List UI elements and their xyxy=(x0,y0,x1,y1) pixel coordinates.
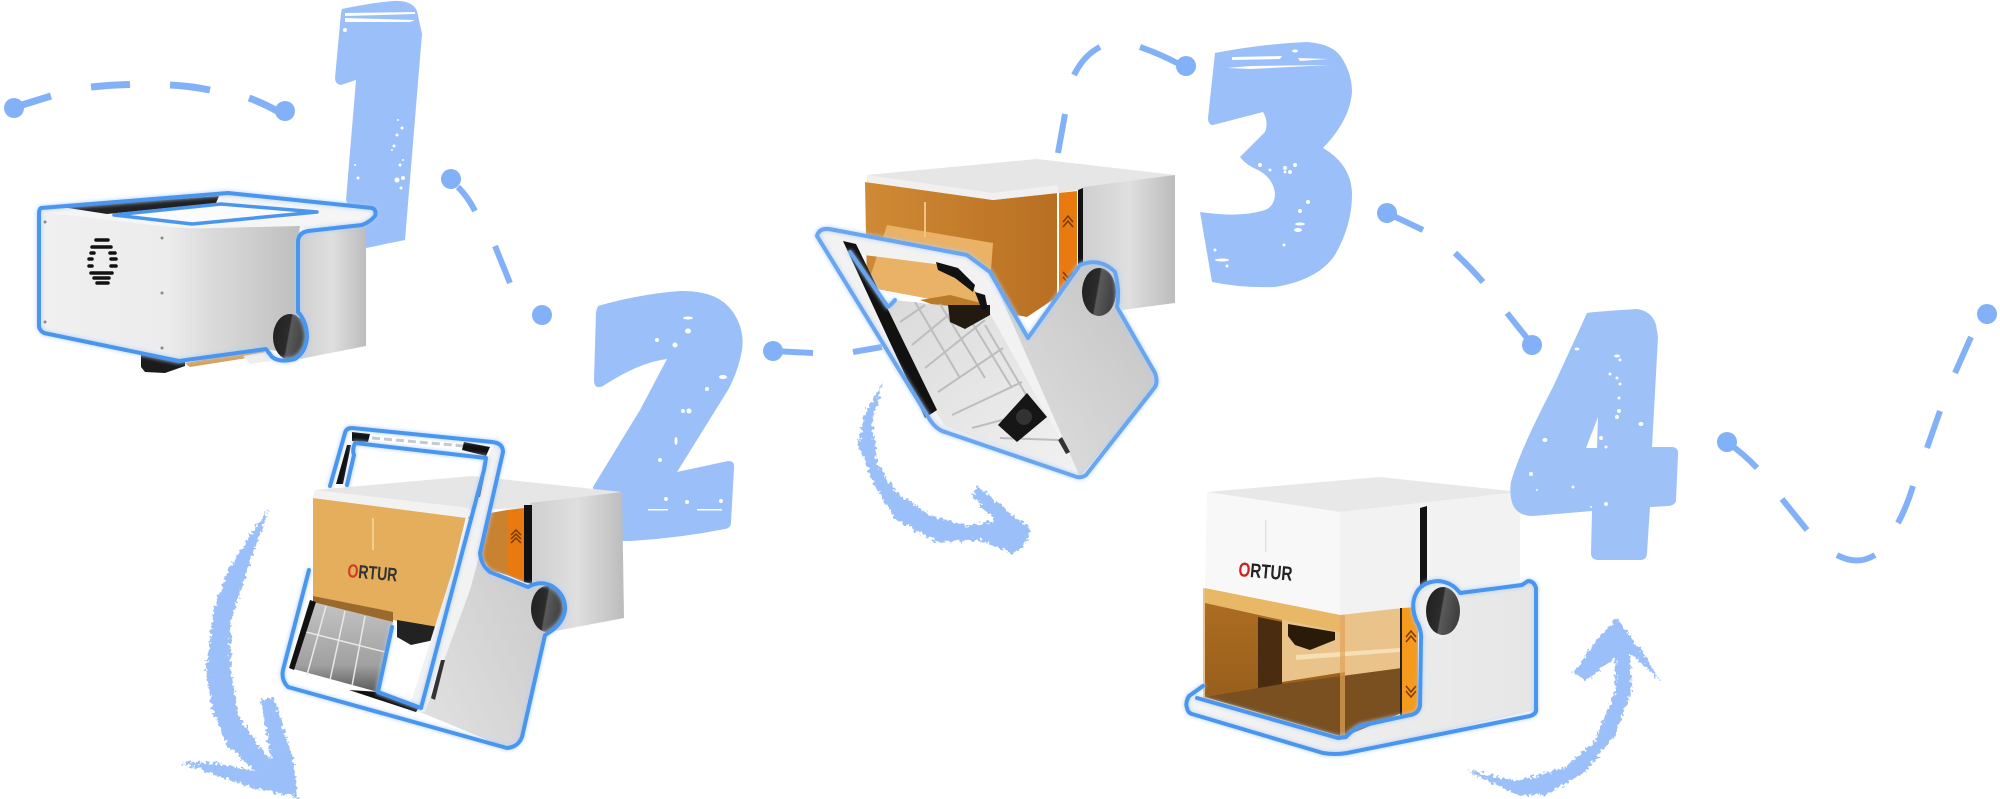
dashed path segment 2 xyxy=(441,169,552,325)
screws xyxy=(44,220,164,350)
orange strip xyxy=(507,508,524,582)
lid panel frame xyxy=(333,428,495,485)
print head xyxy=(397,620,438,645)
device step 4: closed with base xyxy=(1186,477,1536,754)
logo: ORTUR xyxy=(1238,559,1294,586)
dashed path segment 1 xyxy=(4,84,295,121)
lid frame xyxy=(817,229,1080,477)
interior ribs xyxy=(888,300,1073,470)
blue outline xyxy=(817,229,1156,477)
black slot xyxy=(1420,506,1427,587)
rotation arrow 2 xyxy=(180,510,298,797)
orange strip xyxy=(1402,607,1418,716)
knob xyxy=(1415,585,1455,639)
print head xyxy=(948,305,990,329)
digit 2 xyxy=(593,291,743,541)
orange front xyxy=(313,498,466,630)
rotation arrow 4 xyxy=(1467,618,1660,795)
base xyxy=(1186,581,1536,753)
fan xyxy=(998,393,1047,442)
blue outline xyxy=(39,193,376,361)
orange front xyxy=(865,182,1057,317)
orange chamber xyxy=(1203,588,1402,737)
lid frame rails xyxy=(843,241,937,418)
rotation arrow 3 xyxy=(858,382,1030,554)
top face xyxy=(41,193,375,232)
device step 2: lid opening xyxy=(283,428,624,748)
device step 1: closed base xyxy=(39,193,376,373)
body side xyxy=(1083,175,1175,310)
dashed path segment 4 xyxy=(1377,203,1542,355)
lid panel body xyxy=(420,442,565,748)
orange strip xyxy=(1059,191,1077,297)
digit 4 xyxy=(1510,309,1678,560)
body side xyxy=(530,492,624,633)
blue outline xyxy=(283,428,565,748)
body top xyxy=(867,159,1175,200)
body top xyxy=(315,476,622,510)
digit 3 xyxy=(1200,42,1352,287)
body front and side xyxy=(39,212,300,361)
dashed path segment 3 xyxy=(763,47,1196,361)
device step 3: lid folding xyxy=(817,159,1175,477)
lid wing xyxy=(990,262,1155,477)
knob xyxy=(1082,268,1116,316)
blue outline xyxy=(1186,581,1536,754)
logo: ORTUR xyxy=(347,561,398,586)
digit 1 xyxy=(335,1,422,248)
knob xyxy=(273,314,307,360)
knob xyxy=(531,586,563,632)
interior tiles xyxy=(290,602,393,692)
feet xyxy=(141,355,185,373)
dashed path segment 5 xyxy=(1717,304,1997,560)
vent xyxy=(89,240,116,283)
top face xyxy=(1207,477,1520,512)
lid front xyxy=(1205,492,1340,615)
